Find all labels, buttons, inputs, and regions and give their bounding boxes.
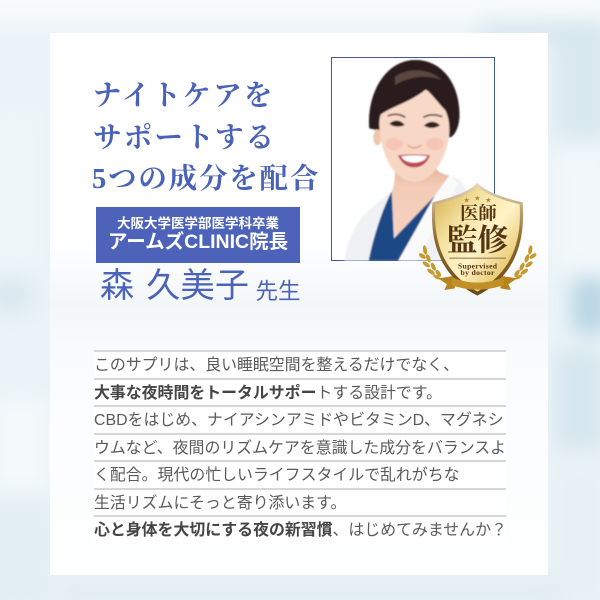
hair back bbox=[369, 60, 459, 137]
badge text: by doctor bbox=[461, 268, 495, 277]
nose bbox=[407, 145, 421, 148]
coat bbox=[343, 176, 466, 261]
banner: doctor credentials: アームズCLINIC院長 bbox=[108, 231, 288, 253]
neck and chest bbox=[391, 163, 449, 238]
badge text bbox=[447, 204, 508, 277]
photo: doctor portrait bbox=[331, 57, 495, 261]
text block: description: く配合。現代の忙しいライフスタイルで乱れがちな bbox=[94, 467, 459, 484]
title: 5つの成分を配合 bbox=[92, 164, 320, 195]
text block: description: 心と身体を大切にする夜の新習慣、はじめてみませんか？ bbox=[94, 522, 507, 539]
title bbox=[92, 81, 320, 195]
shield bbox=[432, 183, 523, 296]
text block: description: CBDをはじめ、ナイアシンアミドやビタミンD、マグネシ bbox=[94, 412, 504, 429]
face bbox=[379, 88, 449, 182]
badge text: 医師 bbox=[460, 204, 497, 224]
ribbon tails bbox=[438, 276, 455, 290]
title: サポートする bbox=[93, 122, 276, 154]
badge text: 監修 bbox=[447, 223, 508, 257]
stars bbox=[463, 193, 492, 205]
text block: description: 大事な夜時間をトータルサポートする設計です。 bbox=[94, 384, 442, 402]
text block: description: このサプリは、良い睡眠空間を整えるだけでなく、 bbox=[94, 357, 459, 374]
mouth bbox=[398, 154, 430, 167]
lapel bbox=[398, 175, 458, 261]
stars: ★ bbox=[463, 196, 470, 205]
blush bbox=[385, 138, 403, 150]
laurels bbox=[418, 245, 537, 280]
badge text: Supervised bbox=[458, 262, 498, 271]
fringe bbox=[369, 60, 459, 132]
ribbon bbox=[451, 278, 504, 290]
badge: doctor supervised bbox=[418, 182, 536, 296]
eyes bbox=[389, 121, 405, 127]
text block: description: ウムなど、夜間のリズムケアを意識した成分をバランスよ bbox=[94, 440, 506, 456]
stars: ★ bbox=[474, 193, 481, 202]
ears bbox=[373, 129, 381, 145]
scrubs bbox=[369, 192, 435, 261]
title: ナイトケアを bbox=[93, 81, 275, 112]
text block: description bbox=[94, 350, 506, 544]
text block: description: 生活リズムにそっと寄り添います。 bbox=[94, 494, 346, 512]
banner: doctor credentials bbox=[96, 207, 300, 263]
stars: ★ bbox=[485, 196, 492, 205]
doctor name: 森 久美子 先生 bbox=[100, 267, 300, 305]
banner: doctor credentials: 大阪大学医学部医学科卒業 bbox=[117, 216, 279, 231]
panel: white content card bbox=[50, 33, 548, 575]
